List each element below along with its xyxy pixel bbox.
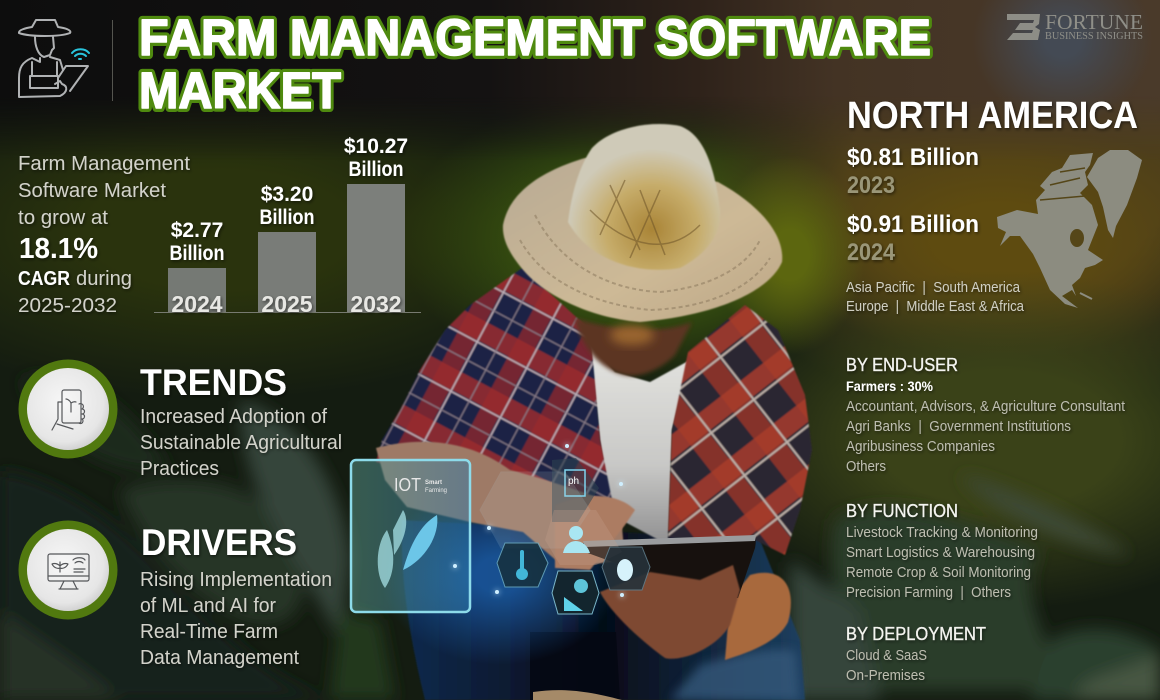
- panel: by function: Smart Logistics & Warehousing: [846, 544, 1035, 561]
- growth statement: Software Market: [18, 180, 166, 202]
- growth statement: CAGR: [18, 268, 70, 290]
- 2023 value: 2023: [847, 172, 895, 199]
- icon: monitor with plant and wifi: [18, 520, 118, 620]
- IoT panel: Farming: [425, 488, 447, 494]
- forearm: [376, 442, 625, 568]
- bar 2032: Billion: [348, 158, 404, 181]
- description: [140, 569, 332, 669]
- bar 2025: 2025: [261, 291, 313, 317]
- panel: north america: [846, 95, 1142, 315]
- panel: trends: [18, 360, 342, 480]
- panel: by deployment: Cloud & SaaS: [846, 647, 927, 664]
- top-left farmer icon: [19, 20, 89, 97]
- hexagon: pH: ph: [568, 476, 579, 487]
- growth statement: [18, 153, 190, 317]
- hexagon: pH: [552, 458, 599, 522]
- icon: hand holding phone: [18, 360, 118, 458]
- panel: by end-user: Accountant, Advisors, & Agriculture Consultant: [846, 398, 1126, 415]
- jeans: [402, 520, 805, 700]
- description: Rising Implementation: [140, 569, 332, 591]
- bar 2024: [168, 219, 226, 317]
- bar 2032: 2032: [350, 291, 402, 317]
- panel: drivers: [18, 520, 332, 669]
- heading: DRIVERS: [141, 522, 297, 563]
- heading: NORTH AMERICA: [847, 95, 1138, 137]
- bar 2024: 2024: [171, 291, 223, 317]
- 2023 value: [847, 144, 979, 199]
- wifi arcs: [72, 49, 89, 59]
- panel: by function: [846, 501, 1038, 601]
- growth statement: during: [76, 268, 132, 290]
- IoT panel: Smart: [425, 480, 442, 486]
- description: Increased Adoption of: [140, 406, 327, 428]
- other regions: [846, 279, 1025, 315]
- 2024 value: $0.91 Billion: [847, 211, 979, 238]
- bar 2025: $3.20: [261, 183, 313, 206]
- logo: Fortune Business Insights: FORTUNE: [1045, 10, 1143, 34]
- hexagon: bug: [602, 547, 650, 590]
- right knee: [670, 649, 800, 700]
- panel: by function: Livestock Tracking & Monitoring: [846, 524, 1038, 541]
- other regions: Europe | Middle East & Africa: [846, 298, 1025, 315]
- growth statement: Farm Management: [18, 153, 190, 175]
- panel: by end-user: Farmers : 30%: [846, 378, 933, 394]
- title: FARM MANAGEMENT SOFTWARE: [139, 9, 931, 66]
- hexagon: thermometer: [497, 543, 548, 587]
- bar 2024: Billion: [170, 242, 224, 265]
- hexagon: location pin: [552, 571, 599, 614]
- IoT panel: [351, 460, 470, 612]
- hat brim: [503, 158, 782, 322]
- description: Sustainable Agricultural: [140, 432, 342, 454]
- title: MARKET: [139, 62, 341, 119]
- panel: by end-user: Agri Banks | Government Institutions: [846, 418, 1071, 435]
- panel: by end-user: Others: [846, 458, 886, 475]
- heading: TRENDS: [140, 362, 287, 403]
- panel: by deployment: On-Premises: [846, 667, 925, 684]
- bar 2024: $2.77: [171, 219, 223, 242]
- glow particles: [453, 444, 624, 597]
- growth statement: to grow at: [18, 207, 108, 229]
- panel: by deployment: BY DEPLOYMENT: [846, 624, 986, 644]
- hand holding tablet: [600, 565, 740, 659]
- panel: by function: BY FUNCTION: [846, 501, 958, 521]
- logo: Fortune Business Insights: [1007, 10, 1143, 42]
- title: [139, 9, 931, 119]
- bar chart: market size: [154, 135, 421, 317]
- description: of ML and AI for: [140, 595, 276, 617]
- 2023 value: $0.81 Billion: [847, 144, 979, 171]
- description: Real-Time Farm: [140, 621, 278, 643]
- bar 2025: Billion: [260, 206, 314, 229]
- panel: by end-user: Agribusiness Companies: [846, 438, 995, 455]
- panel: by end-user: BY END-USER: [846, 355, 958, 375]
- panel: by deployment: [846, 624, 986, 684]
- 2024 value: [847, 211, 979, 266]
- pointing hand: [555, 496, 635, 570]
- farmer photo: [376, 124, 812, 700]
- title: FARM MANAGEMENT SOFTWARE: [139, 9, 931, 66]
- bar 2032: $10.27: [344, 135, 408, 158]
- right arm: [725, 573, 791, 660]
- divider: [112, 20, 113, 101]
- shirt left side: [376, 268, 620, 515]
- panel: by end-user: [846, 355, 1126, 475]
- white t-shirt: [590, 345, 690, 545]
- description: Data Management: [140, 647, 299, 669]
- growth statement: 2025-2032: [18, 295, 117, 317]
- growth statement: 18.1%: [19, 233, 98, 265]
- map: [997, 150, 1142, 308]
- hexagon: drone: [480, 472, 590, 548]
- panel: by function: Remote Crop & Soil Monitoring: [846, 564, 1031, 581]
- face: [575, 318, 692, 376]
- blue hologram glow: [380, 485, 620, 665]
- bar 2032: [344, 135, 408, 317]
- tablet: [583, 536, 756, 600]
- bar 2025: [258, 183, 316, 317]
- IoT holographic panel and hexagon icons: [351, 444, 650, 614]
- description: [140, 406, 342, 480]
- description: Practices: [140, 458, 219, 480]
- hexagon: person: [545, 510, 622, 565]
- panel: by function: Precision Farming | Others: [846, 584, 1011, 601]
- hat crown: [568, 124, 720, 270]
- title: MARKET: [139, 62, 341, 119]
- other regions: Asia Pacific | South America: [846, 279, 1021, 296]
- logo: Fortune Business Insights: BUSINESS INSIGHTS: [1045, 31, 1143, 42]
- 2024 value: 2024: [847, 239, 896, 266]
- shirt right side: [668, 305, 812, 555]
- IoT panel: IOT: [394, 475, 421, 495]
